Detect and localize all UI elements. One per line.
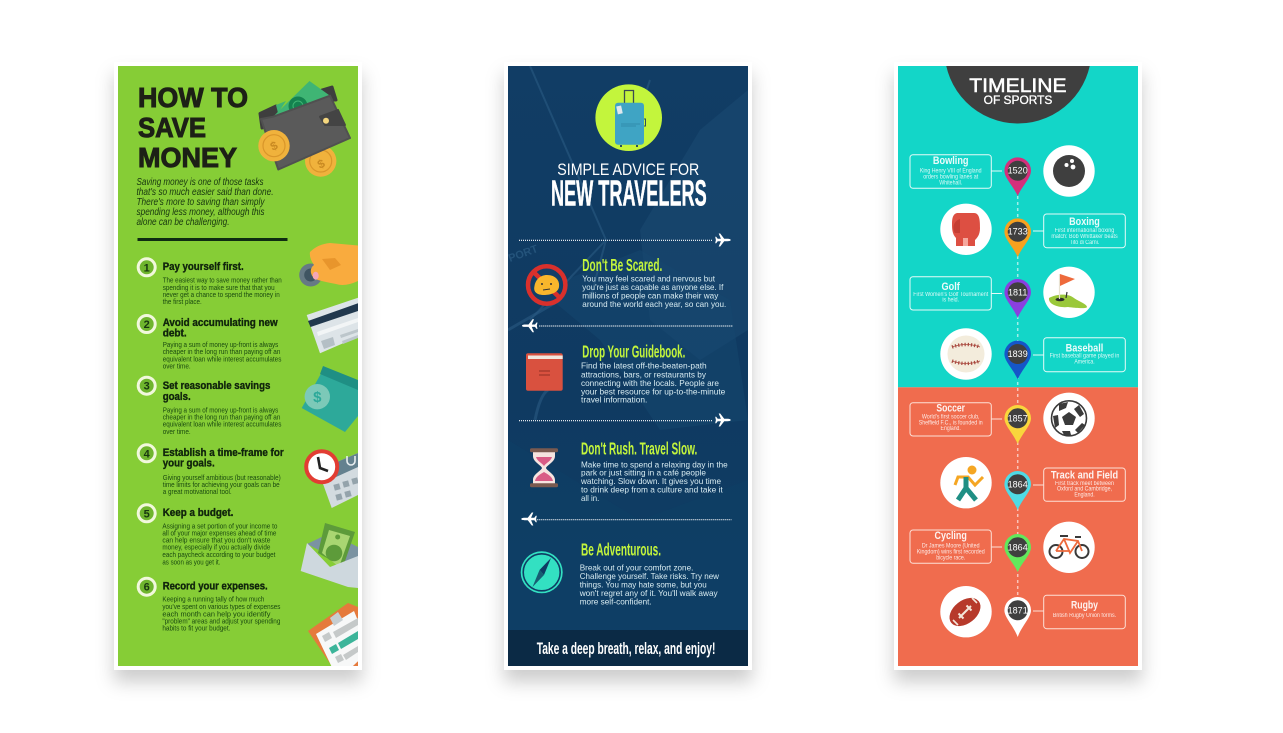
step 3 xyxy=(138,377,282,436)
event: golf xyxy=(910,267,1095,318)
tip 2: Drop Your Guidebook. xyxy=(582,342,685,362)
step 2: over time. xyxy=(163,361,191,370)
event: cycling: Cycling xyxy=(935,530,967,542)
event: boxing: Tito di Carni. xyxy=(1070,240,1100,246)
event: bowling: orders bowling lanes at xyxy=(923,175,978,181)
step 4: Establish a time-frame for xyxy=(163,447,284,459)
step 1: 1 xyxy=(144,262,150,274)
icon: plane left xyxy=(522,319,538,332)
intro text: spending less money, although this xyxy=(136,207,264,218)
event: cycling xyxy=(910,522,1095,573)
footer banner xyxy=(508,630,748,666)
panel: simple advice for new travelers xyxy=(504,62,752,670)
event: track and field: England. xyxy=(1074,493,1095,499)
title: MONEY xyxy=(138,142,237,173)
tip 4: things. You may hate some, but you xyxy=(580,579,707,589)
tip 4: more self-confident. xyxy=(580,596,652,606)
icon: plane left xyxy=(521,512,537,526)
step 5: Keep a budget. xyxy=(163,507,233,519)
step 1: the first place. xyxy=(163,297,202,306)
event: rugby: British Rugby Union forms. xyxy=(1053,613,1116,619)
event: bowling xyxy=(910,145,1095,197)
event: bowling: King Henry VIII of England xyxy=(920,169,982,175)
tip 2: Find the latest off-the-beaten-path xyxy=(581,360,707,370)
tip 4: Break out of your comfort zone. xyxy=(580,563,693,573)
event: baseball: 1839 xyxy=(1008,349,1028,359)
icon: plane right xyxy=(715,414,731,426)
title: SAVE xyxy=(138,112,206,143)
icon: clipboard xyxy=(308,603,358,666)
event: rugby: Rugby xyxy=(1071,600,1099,612)
icon: money bag: $ xyxy=(313,389,322,406)
tip 1: You may feel scared and nervous but xyxy=(582,274,716,284)
step 1: spending it is to make sure that that you xyxy=(163,283,275,292)
event: rugby: 1871 xyxy=(1008,605,1028,615)
footer banner: Take a deep breath, relax, and enjoy! xyxy=(537,639,715,658)
intro text: There's more to saving than simply xyxy=(136,197,265,208)
event: boxing xyxy=(940,204,1125,257)
intro text xyxy=(136,177,274,228)
step 6: "problem" areas and adjust your spending xyxy=(162,617,280,626)
step 3: 3 xyxy=(144,381,150,393)
step 5: 5 xyxy=(144,508,150,520)
title badge: OF SPORTS xyxy=(984,95,1053,107)
tip 4 xyxy=(579,540,720,606)
tip 3: Make time to spend a relaxing day in the xyxy=(581,459,728,469)
icon: compass xyxy=(521,551,563,593)
event: boxing: match: Bob Whittaker beats xyxy=(1051,234,1118,240)
icon: guidebook xyxy=(526,353,563,391)
event: track and field xyxy=(940,457,1125,510)
title badge: TIMELINE xyxy=(969,76,1067,97)
background map: PORT xyxy=(507,243,540,265)
tip 2: connecting with the locals. People are xyxy=(581,378,719,388)
event: soccer: Sheffield F.C., is founded in xyxy=(919,420,983,426)
tip 3: all in. xyxy=(581,493,599,503)
icon: plane right xyxy=(715,234,731,246)
event: bowling: Bowling xyxy=(933,155,969,167)
step 2 xyxy=(138,316,282,370)
step 1: never get a chance to spend the money in xyxy=(163,290,280,299)
event: golf: 1811 xyxy=(1008,287,1027,297)
event: baseball: Baseball xyxy=(1066,343,1103,355)
step 1: The easiest way to save money rather than xyxy=(163,276,282,285)
title: SIMPLE ADVICE FOR xyxy=(557,161,699,179)
step 2: 2 xyxy=(144,319,150,331)
step 4: Giving yourself ambitious (but reasonable) xyxy=(163,473,281,482)
tip 3: watching. Slow down. It gives you time xyxy=(580,476,721,486)
tip 1: millions of people can make their way xyxy=(582,290,719,300)
step 6: you've spent on various types of expenses xyxy=(162,602,281,611)
title badge xyxy=(946,66,1090,124)
tip 1 xyxy=(582,255,726,309)
intro text: that's so much easier said than done. xyxy=(136,187,274,198)
step 2: equivalent loan while interest accumulates xyxy=(163,354,282,363)
tip 2 xyxy=(581,342,726,405)
icon: suitcase xyxy=(595,84,662,151)
icon: wallet with coins: $ xyxy=(268,138,280,154)
icon: clock and calendar xyxy=(306,451,359,508)
event: track and field: 1864 xyxy=(1008,479,1028,489)
event: golf: First Women's Golf Tournament xyxy=(913,292,988,298)
icon: wallet with coins xyxy=(258,81,350,177)
tip 2: attractions, bars, or restaurants by xyxy=(581,370,707,380)
step 6: habits to fit your budget. xyxy=(162,624,230,633)
event: cycling: Dr James Moore (United xyxy=(922,543,980,549)
step 3: Paying a sum of money up-front is always xyxy=(163,405,279,414)
event: soccer: Soccer xyxy=(936,402,966,414)
step 1 xyxy=(138,259,282,306)
step 6: Keeping a running tally of how much xyxy=(162,595,264,604)
step 3: cheaper in the long run than paying off an xyxy=(163,412,280,421)
icon: hourglass xyxy=(530,448,558,487)
tip 4: won't regret any of it. You'll walk away xyxy=(579,588,718,598)
event: cycling: bicycle race. xyxy=(936,555,965,561)
title xyxy=(138,82,248,173)
event: bowling: Whitehall. xyxy=(939,180,962,186)
event: golf: Golf xyxy=(942,281,960,293)
step 5 xyxy=(138,505,277,566)
title: HOW TO xyxy=(138,82,248,113)
step 3: Set reasonable savings xyxy=(163,380,270,392)
step 2: Paying a sum of money up-front is always xyxy=(163,340,279,349)
title: NEW TRAVELERS xyxy=(551,173,707,214)
panel: how to save money xyxy=(114,62,370,680)
step 2: Avoid accumulating new xyxy=(163,317,278,329)
tip 4: Be Adventurous. xyxy=(581,540,661,560)
tip 3: park or just sitting in a café people xyxy=(581,468,706,478)
step 4 xyxy=(138,445,284,496)
event: track and field: First track meet between xyxy=(1055,481,1114,487)
event: bowling: 1520 xyxy=(1008,166,1028,176)
step 5: can help ensure that you don't waste xyxy=(162,536,270,545)
intro text: Saving money is one of those tasks xyxy=(136,177,264,188)
event: soccer: England. xyxy=(941,426,961,432)
tip 4: Challenge yourself. Take risks. Try new xyxy=(580,571,720,581)
step 1: Pay yourself first. xyxy=(163,261,244,273)
tip 3: Don't Rush. Travel Slow. xyxy=(581,438,697,458)
background map xyxy=(508,66,748,420)
event: boxing: 1733 xyxy=(1008,227,1028,237)
step 2: debt. xyxy=(163,328,187,340)
icon: no fear xyxy=(528,266,565,304)
event: baseball: America. xyxy=(1074,360,1095,366)
icon: credit card xyxy=(307,298,358,353)
tip 3 xyxy=(580,438,728,503)
step 3: equivalent loan while interest accumulates xyxy=(163,420,282,429)
event: cycling: Kingdom) wins first recorded xyxy=(917,549,985,555)
step 5: Assigning a set portion of your income to xyxy=(162,521,277,530)
icon: money bag xyxy=(302,366,358,432)
title xyxy=(551,161,707,214)
icon: wallet with coins: $ xyxy=(315,156,327,172)
step 5: each paycheck according to your budget xyxy=(162,550,275,559)
step 4: time limits for achieving your goals can be xyxy=(163,480,280,489)
step 6: Record your expenses. xyxy=(163,580,268,592)
event: baseball: First baseball game played in xyxy=(1050,354,1119,360)
event: boxing: First international boxing xyxy=(1055,228,1114,234)
event: boxing: Boxing xyxy=(1069,216,1100,228)
tip 1: around the world each year, so can you. xyxy=(582,299,726,309)
event: soccer: 1857 xyxy=(1008,413,1028,423)
step 5: money, especially if you actually divide xyxy=(162,543,270,552)
event: rugby xyxy=(940,586,1125,637)
tip 1: Don't Be Scared. xyxy=(582,255,662,275)
event: track and field: Oxford and Cambridge, xyxy=(1057,487,1112,493)
step 5: all of your major expenses ahead of time xyxy=(162,528,276,537)
icon: hand holding coin xyxy=(299,243,358,286)
step 3: goals. xyxy=(163,391,191,403)
step 6: 6 xyxy=(144,582,150,594)
step 3: over time. xyxy=(163,427,191,436)
step 4: 4 xyxy=(144,448,151,460)
panel: timeline of sports xyxy=(894,0,1142,670)
event: cycling: 1864 xyxy=(1008,542,1028,552)
event: golf: is held. xyxy=(942,298,959,304)
step 6 xyxy=(138,578,281,633)
event: soccer xyxy=(910,393,1095,444)
tip 3: to drink deep from a culture and take it xyxy=(581,485,723,495)
event: baseball xyxy=(940,328,1125,380)
step 4: a great motivational tool. xyxy=(163,487,232,496)
event: soccer: World's first soccer club, xyxy=(922,414,980,420)
step 4: your goals. xyxy=(163,458,215,470)
tip 2: travel information. xyxy=(581,395,647,405)
intro text: alone can be challenging. xyxy=(136,217,230,228)
tip 1: you're just as capable as anyone else. If xyxy=(582,282,724,292)
event: track and field: Track and Field xyxy=(1051,470,1118,482)
step 5: as soon as you get it. xyxy=(162,557,220,566)
step 6: each month can help you identify xyxy=(162,609,271,618)
icon: envelope with cash xyxy=(301,523,358,588)
step 2: cheaper in the long run than paying off an xyxy=(163,347,280,356)
tip 2: your best resource for up-to-the-minute xyxy=(581,386,726,396)
